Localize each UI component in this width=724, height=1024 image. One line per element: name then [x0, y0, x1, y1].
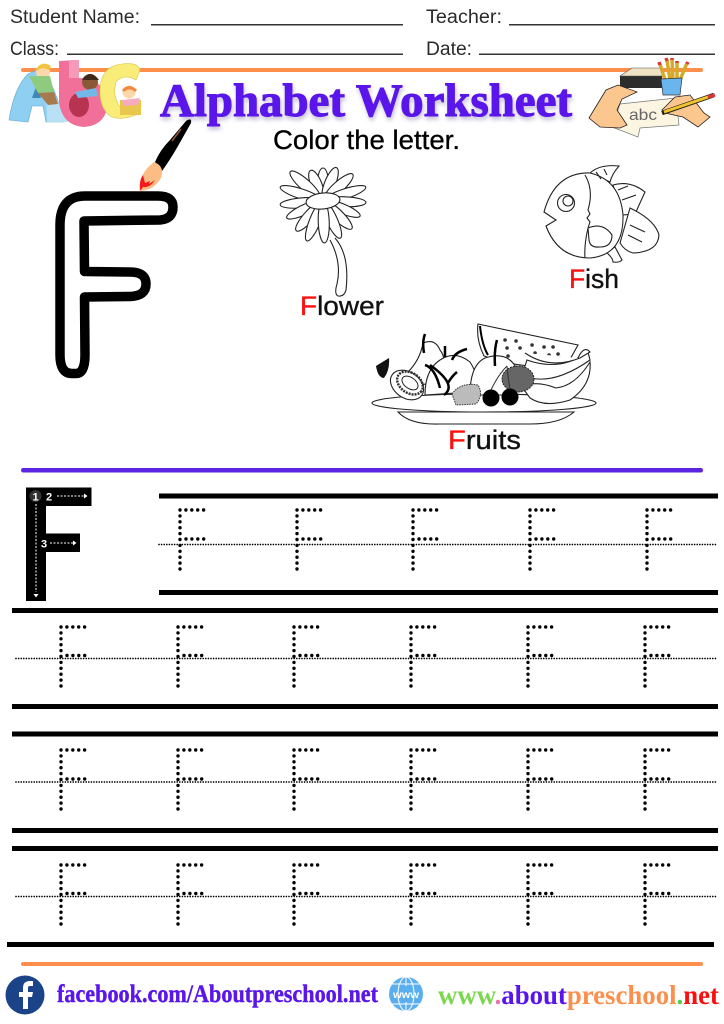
icon: globe [389, 977, 423, 1011]
flower stem [330, 238, 347, 296]
picture: fish [544, 166, 659, 262]
header fields [10, 7, 715, 60]
stroke-order letter F: 1 [32, 492, 39, 504]
icon: ABC kids logo [9, 60, 141, 127]
orange bottom rule [21, 962, 703, 966]
citrus [502, 366, 534, 392]
tracing row 4 [7, 848, 718, 944]
picture: fruit plate [372, 324, 596, 424]
bananas [522, 350, 590, 404]
pear and pepper [408, 342, 518, 395]
student name field: Student Name: [10, 7, 140, 28]
instruction text: Color the letter. [273, 125, 460, 155]
flower petals [279, 166, 367, 243]
plate [372, 394, 596, 424]
teacher field: Teacher: [426, 7, 502, 28]
icon: paint brush [140, 119, 191, 191]
cherries [482, 366, 518, 406]
fruit stems [423, 334, 497, 395]
picture: flower [279, 166, 367, 296]
purple divider [21, 468, 703, 472]
orange top rule [21, 68, 703, 72]
icon: facebook [6, 976, 44, 1014]
stroke-order letter F: 3 [41, 538, 47, 550]
big outline letter F [60, 196, 173, 374]
icon: writing hands, books and pencils: abc [629, 107, 657, 124]
label: Flower: Flower [300, 291, 384, 321]
tracing row 1 [159, 496, 718, 592]
flower centre [305, 191, 341, 211]
tracing row 3 [12, 734, 718, 830]
title: Alphabet Worksheet [160, 75, 572, 127]
icon: globe: www [392, 990, 419, 1001]
website address: www.aboutpreschool.net [438, 980, 719, 1010]
tracing row 2 [12, 610, 718, 706]
label: Fish: Fish [569, 264, 619, 294]
stroke-order letter F: 2 [46, 492, 52, 504]
watermelon [478, 324, 578, 366]
icon: writing hands, books and pencils [589, 58, 715, 137]
class field: Class: [10, 39, 59, 60]
stroke-order letter F [26, 488, 92, 601]
strawberry [452, 384, 481, 405]
facebook address: facebook.com/Aboutpreschool.net [57, 981, 379, 1008]
date field: Date: [426, 39, 472, 60]
kiwi slice [376, 358, 429, 406]
label: Fruits: Fruits [448, 425, 521, 455]
